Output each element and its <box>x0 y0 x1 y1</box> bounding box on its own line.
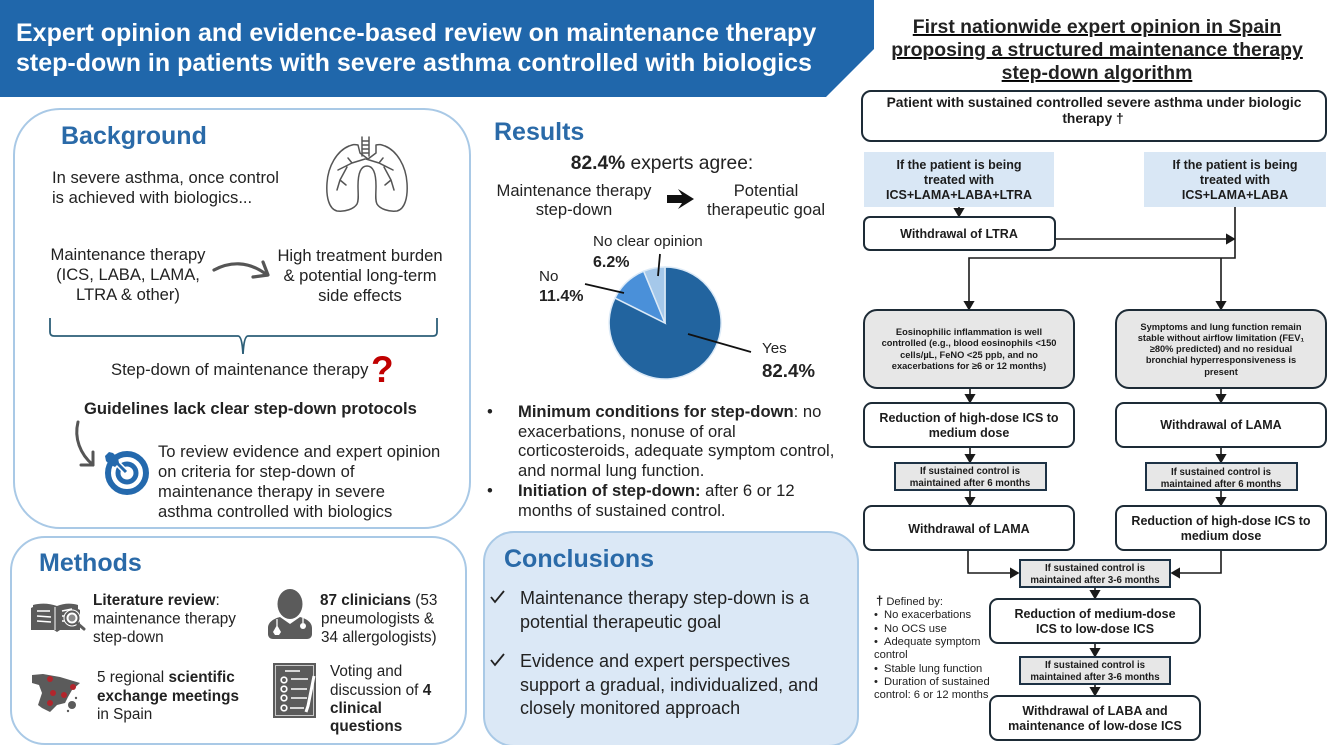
footnote: definition: • <box>874 609 878 621</box>
footnote: definition: No OCS use <box>884 623 947 635</box>
text: conclusion 2: closely monitored approach <box>520 698 740 718</box>
text: results bullets: months of sustained control. <box>518 501 726 520</box>
box: patient: therapy † <box>1062 111 1124 126</box>
box: symptoms: bronchial hyperresponsiveness is <box>1146 355 1296 365</box>
box: reduction right: medium dose <box>1181 529 1261 543</box>
box: triple: ICS+LAMA+LABA <box>1182 188 1288 202</box>
pie labels and leader lines: 11.4% <box>539 288 583 305</box>
text: maintenance therapy: (ICS, LABA, LAMA, <box>56 265 200 284</box>
box: reduction left <box>864 403 1074 447</box>
box: symptoms: present <box>1204 367 1238 377</box>
footnote: definition: control: 6 or 12 months <box>874 689 989 701</box>
footnote: definition: • <box>874 676 878 688</box>
text: conclusion 2 <box>491 651 818 718</box>
text: maintenance therapy: LTRA & other) <box>76 285 180 304</box>
text: literature review <box>93 592 236 646</box>
box: withdrawal LABA <box>990 696 1200 740</box>
text: objective <box>158 442 440 521</box>
panel: conclusions <box>484 532 858 745</box>
pie labels and leader lines: 6.2% <box>593 254 629 271</box>
gate: 6 months right: maintained after 6 months <box>1161 479 1281 490</box>
text: clinicians: 87 clinicians (53 <box>320 592 437 609</box>
text: voting: Voting and <box>330 663 402 680</box>
box: reduction medium: Reduction of medium-dose <box>1014 607 1176 621</box>
text: regional meetings: in Spain <box>97 706 152 723</box>
box: withdrawal LTRA <box>864 217 1055 250</box>
box: triple plus LTRA <box>864 152 1054 207</box>
text: guidelines: Guidelines lack clear step-down protocols <box>84 399 417 418</box>
box: triple: treated with <box>1200 173 1270 187</box>
box: eosinophilic: exacerbations for ≥6 or 12 months) <box>892 361 1046 371</box>
text: step-down question <box>111 349 394 390</box>
arrow: to target <box>77 422 93 465</box>
title: algorithm: proposing a structured maintenance therapy <box>891 39 1303 61</box>
box: reduction right: Reduction of high-dose ICS to <box>1131 514 1311 528</box>
gate: 6 months left <box>895 463 1046 490</box>
pie labels and leader lines: No <box>539 268 558 285</box>
footnote: definition: control <box>874 649 908 661</box>
box: withdrawal LAMA right <box>1116 403 1326 447</box>
panel: background <box>14 109 470 528</box>
footnote: definition: Adequate symptom <box>884 636 980 648</box>
box: eosinophilic: cells/µL, FeNO <25 ppb, and no <box>900 350 1038 360</box>
box: symptoms: ≥80% predicted) and no residual <box>1150 344 1292 354</box>
heading: methods: Methods <box>39 549 142 577</box>
flow connectors <box>959 207 1235 695</box>
pie labels and leader lines: 82.4% <box>762 360 815 381</box>
pie labels and leader lines: No clear opinion <box>593 233 703 250</box>
text: results bullets: Minimum conditions for step-down: no <box>518 402 821 421</box>
text: maintenance therapy <box>51 245 206 304</box>
text: clinicians: 34 allergologists) <box>321 629 437 646</box>
text: regional meetings: exchange meetings <box>97 688 239 705</box>
text: literature review: Literature review: <box>93 592 220 609</box>
footnote: definition: Duration of sustained <box>884 676 990 688</box>
pie labels and leader lines <box>539 233 815 381</box>
text: potential goal: therapeutic goal <box>707 200 825 219</box>
text: voting: discussion of 4 <box>330 682 432 699</box>
text: regional meetings <box>97 669 239 723</box>
footnote: definition: • <box>874 623 878 635</box>
box: withdrawal LABA: maintenance of low-dose ICS <box>1008 719 1182 733</box>
box: patient: Patient with sustained controlled severe asthma under biologic <box>887 95 1302 110</box>
text: potential goal: Potential <box>734 181 798 200</box>
text: results bullets: • <box>487 402 493 421</box>
box: triple plus LTRA: treated with <box>924 173 994 187</box>
text: voting: questions <box>330 718 402 735</box>
header banner: Expert opinion and evidence-based review on maintenance therapy <box>16 19 816 47</box>
panel: algorithm <box>862 16 1326 740</box>
text: results bullets: • <box>487 481 493 500</box>
box: symptoms: stable without airflow limitation (FEV₁ <box>1138 333 1304 343</box>
heading: results: Results <box>494 118 584 146</box>
text: severe asthma intro: In severe asthma, once control <box>52 168 279 187</box>
text: objective: To review evidence and expert opinion <box>158 442 440 461</box>
footnote: definition: † Defined by: <box>876 593 943 608</box>
arrow: maintenance to burden <box>214 262 268 277</box>
gate: 3-6 months lower <box>1020 657 1170 684</box>
box: withdrawal LABA: Withdrawal of LABA and <box>1022 704 1168 718</box>
arrow: black <box>667 189 694 209</box>
text: treatment burden: side effects <box>318 286 402 305</box>
text: voting <box>330 663 432 735</box>
box: eosinophilic: controlled (e.g., blood eosinophils <150 <box>882 338 1056 348</box>
text: maintenance step-down: Maintenance therapy <box>497 181 652 200</box>
text: conclusion 2: Evidence and expert perspectives <box>520 651 790 671</box>
heading: background: Background <box>61 122 207 150</box>
text: results bullets <box>487 402 834 520</box>
text: conclusion 2: support a gradual, individualized, and <box>520 675 818 695</box>
gate: 6 months right <box>1146 463 1297 490</box>
text: maintenance therapy: Maintenance therapy <box>51 245 206 264</box>
text: literature review: step-down <box>93 629 164 646</box>
box: eosinophilic: Eosinophilic inflammation is well <box>896 327 1042 337</box>
text: objective: asthma controlled with biologics <box>158 502 392 521</box>
text: results bullets: exacerbations, nonuse of oral <box>518 422 736 441</box>
box: symptoms: Symptoms and lung function remain <box>1140 322 1302 332</box>
gate: 6 months left: If sustained control is <box>920 466 1020 477</box>
icon: doctor <box>268 589 312 639</box>
text: maintenance step-down <box>497 181 652 219</box>
box: triple <box>1144 152 1326 207</box>
footnote: definition: • <box>874 663 878 675</box>
text: treatment burden: High treatment burden <box>277 246 443 265</box>
box: reduction medium: ICS to low-dose ICS <box>1036 622 1154 636</box>
text: step-down question: Step-down of maintenance therapy <box>111 360 369 379</box>
text: literature review: maintenance therapy <box>93 610 236 628</box>
text: treatment burden: & potential long-term <box>283 266 437 285</box>
box: patient <box>862 91 1326 141</box>
icon: target <box>105 452 146 492</box>
text: objective: maintenance therapy in severe <box>158 482 385 501</box>
text: severe asthma intro: is achieved with biologics... <box>52 188 252 207</box>
title: algorithm: step-down algorithm <box>1002 62 1192 84</box>
gate: 3-6 months upper <box>1020 560 1170 587</box>
gate: 3-6 months upper: If sustained control is <box>1045 563 1145 574</box>
gate: 3-6 months upper: maintained after 3-6 months <box>1030 575 1160 586</box>
text: severe asthma intro <box>52 168 279 207</box>
text: conclusion 1: potential therapeutic goal <box>520 612 721 632</box>
box: withdrawal LAMA left: Withdrawal of LAMA <box>908 522 1030 536</box>
icon: book and magnifier <box>31 604 84 632</box>
text: objective: on criteria for step-down of <box>158 462 355 481</box>
pie labels and leader lines: Yes <box>762 340 787 357</box>
panel: methods <box>11 537 466 744</box>
header banner: step-down in patients with severe asthma controlled with biologics <box>16 49 812 77</box>
box: withdrawal LTRA: Withdrawal of LTRA <box>900 227 1018 241</box>
box: reduction left: Reduction of high-dose ICS to <box>879 411 1059 425</box>
text: regional meetings: 5 regional scientific <box>97 669 235 686</box>
gate: 6 months left: maintained after 6 months <box>910 478 1030 489</box>
footnote: definition: Stable lung function <box>884 663 982 675</box>
box: eosinophilic <box>864 310 1074 388</box>
text: maintenance step-down: step-down <box>536 200 612 219</box>
header banner <box>0 0 874 97</box>
box: triple: If the patient is being <box>1172 158 1298 172</box>
icon: checklist <box>273 663 316 718</box>
icon: map of Spain <box>32 674 80 712</box>
heading: conclusions: Conclusions <box>504 545 654 573</box>
footnote: definition: No exacerbations <box>884 609 971 621</box>
text: results bullets: corticosteroids, adequate symptom control, <box>518 441 834 460</box>
title: algorithm <box>891 16 1303 84</box>
box: reduction medium <box>990 599 1200 643</box>
footnote: definition <box>874 593 990 701</box>
text: results bullets: Initiation of step-down: after 6 or 12 <box>518 481 795 500</box>
box: triple plus LTRA: If the patient is being <box>896 158 1022 172</box>
box: reduction left: medium dose <box>929 426 1009 440</box>
box: withdrawal LAMA right: Withdrawal of LAMA <box>1160 418 1282 432</box>
gate: 3-6 months lower: maintained after 3-6 months <box>1030 672 1160 683</box>
text: potential goal <box>707 181 825 219</box>
text: voting: clinical <box>330 700 382 717</box>
box: withdrawal LAMA left <box>864 506 1074 550</box>
gate: 3-6 months lower: If sustained control is <box>1045 660 1145 671</box>
text: clinicians <box>320 592 437 646</box>
box: symptoms <box>1116 310 1326 388</box>
title: algorithm: First nationwide expert opinion in Spain <box>913 16 1281 38</box>
pie chart <box>609 267 721 379</box>
text: step-down question: ? <box>371 349 394 390</box>
panel: results <box>487 118 834 520</box>
brace <box>50 318 437 354</box>
icon: lungs <box>327 137 407 211</box>
text: experts agree: 82.4% experts agree: <box>571 153 753 174</box>
footnote: definition: • <box>874 636 878 648</box>
box: reduction right <box>1116 506 1326 550</box>
box: triple plus LTRA: ICS+LAMA+LABA+LTRA <box>886 188 1032 202</box>
text: results bullets: and normal lung function. <box>518 461 704 480</box>
gate: 6 months right: If sustained control is <box>1171 467 1271 478</box>
text: conclusion 1 <box>491 588 810 632</box>
text: clinicians: pneumologists & <box>321 610 434 628</box>
text: conclusion 1: Maintenance therapy step-down is a <box>520 588 810 608</box>
text: treatment burden <box>277 246 443 305</box>
